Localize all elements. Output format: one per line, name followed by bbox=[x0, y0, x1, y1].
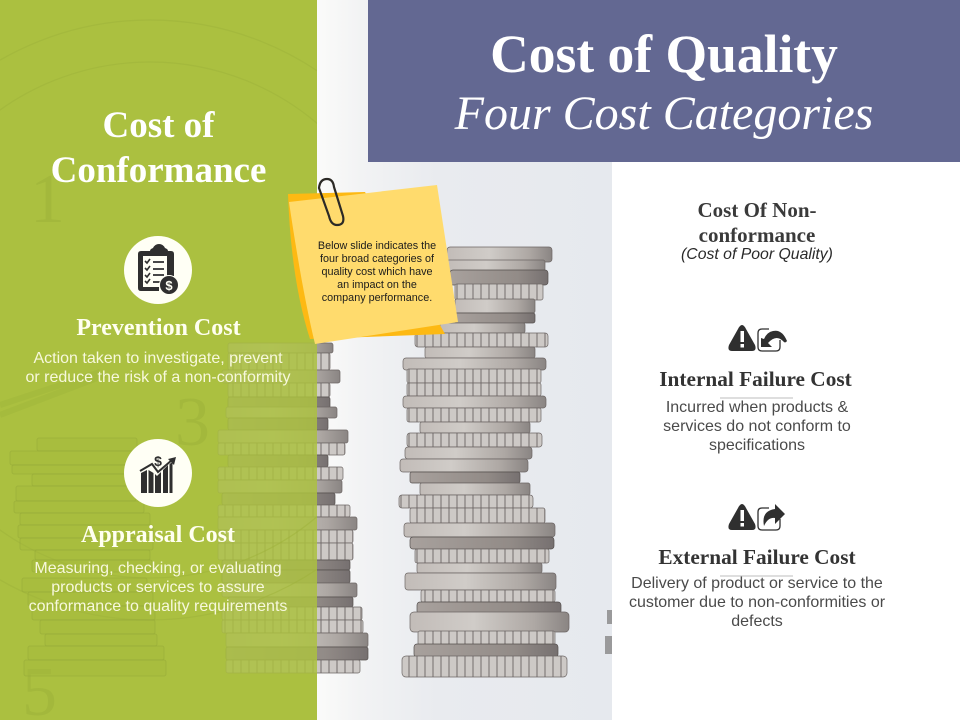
text: external description: Delivery of product or service to the bbox=[631, 575, 883, 592]
green panel bbox=[10, 342, 317, 676]
text: external description: defects bbox=[731, 613, 783, 630]
heading: prevention cost: Prevention Cost bbox=[76, 315, 241, 341]
icon: warning with forward arrow bbox=[728, 504, 785, 530]
title: Cost of Quality bbox=[490, 24, 838, 84]
ghost coin stack bbox=[10, 438, 166, 676]
coin stack: left, behind green panel bbox=[218, 343, 368, 673]
heading: appraisal cost: Appraisal Cost bbox=[81, 522, 235, 548]
note text: company performance. bbox=[322, 292, 432, 304]
icon: paperclip bbox=[319, 179, 343, 225]
coin stack: main bbox=[399, 247, 569, 677]
section: external failure cost bbox=[629, 545, 886, 630]
text: external description bbox=[629, 575, 886, 630]
heading: cost of conformance: Conformance bbox=[51, 150, 266, 191]
heading: cost of non-conformance: (Cost of Poor Quality) bbox=[681, 246, 833, 263]
right white panel bbox=[612, 162, 960, 720]
icon: warning with back arrow bbox=[728, 325, 787, 351]
icon: clipboard with dollar bbox=[124, 236, 192, 304]
photo background bbox=[317, 0, 612, 720]
text: appraisal description: products or services to assure bbox=[51, 579, 265, 596]
text: internal description: Incurred when products & bbox=[666, 399, 848, 416]
text: appraisal description: Measuring, checking, or evaluating bbox=[34, 560, 282, 577]
heading: external failure: External Failure Cost bbox=[658, 545, 856, 569]
icon: rising chart with dollar: $ bbox=[154, 453, 162, 469]
icon: clipboard with dollar: $ bbox=[165, 278, 173, 293]
text: appraisal description: conformance to quality requirements bbox=[29, 598, 287, 615]
note text: Below slide indicates the bbox=[318, 240, 436, 252]
clock face watermark: 1 bbox=[30, 161, 65, 238]
small coins at the white panel edge bbox=[605, 610, 612, 654]
note text: quality cost which have bbox=[321, 266, 433, 278]
text: prevention description bbox=[25, 350, 291, 386]
heading: cost of non-conformance: Cost Of Non- bbox=[698, 198, 817, 222]
subtitle: Four Cost Categories bbox=[454, 87, 873, 140]
note text bbox=[318, 240, 436, 304]
heading: cost of non-conformance: conformance bbox=[699, 223, 815, 247]
note text: an impact on the bbox=[337, 279, 417, 291]
section: internal failure cost bbox=[659, 367, 852, 454]
text: prevention description: or reduce the risk of a non-conformity bbox=[25, 369, 291, 386]
note front bbox=[289, 185, 458, 344]
text: appraisal description bbox=[29, 560, 287, 615]
clock face watermark: 3 bbox=[175, 384, 210, 461]
text: internal description bbox=[663, 399, 851, 454]
heading: cost of non-conformance bbox=[681, 198, 833, 263]
text: external description: customer due to non-conformities or bbox=[629, 594, 886, 611]
heading: internal failure: Internal Failure Cost bbox=[659, 367, 852, 391]
sticky note bbox=[288, 179, 458, 344]
text: prevention description: Action taken to investigate, prevent bbox=[33, 350, 283, 367]
section: prevention cost bbox=[25, 315, 291, 386]
note backing bbox=[288, 192, 445, 339]
heading: cost of conformance: Cost of bbox=[102, 105, 215, 146]
note text: four broad categories of bbox=[320, 253, 435, 265]
section: appraisal cost bbox=[29, 522, 287, 615]
title banner bbox=[368, 0, 960, 162]
heading: cost of conformance bbox=[51, 105, 266, 191]
icon: rising chart with dollar bbox=[124, 439, 192, 507]
text: internal description: specifications bbox=[709, 437, 805, 454]
clock face watermark bbox=[222, 516, 317, 612]
text: internal description: services do not conform to bbox=[663, 418, 851, 435]
